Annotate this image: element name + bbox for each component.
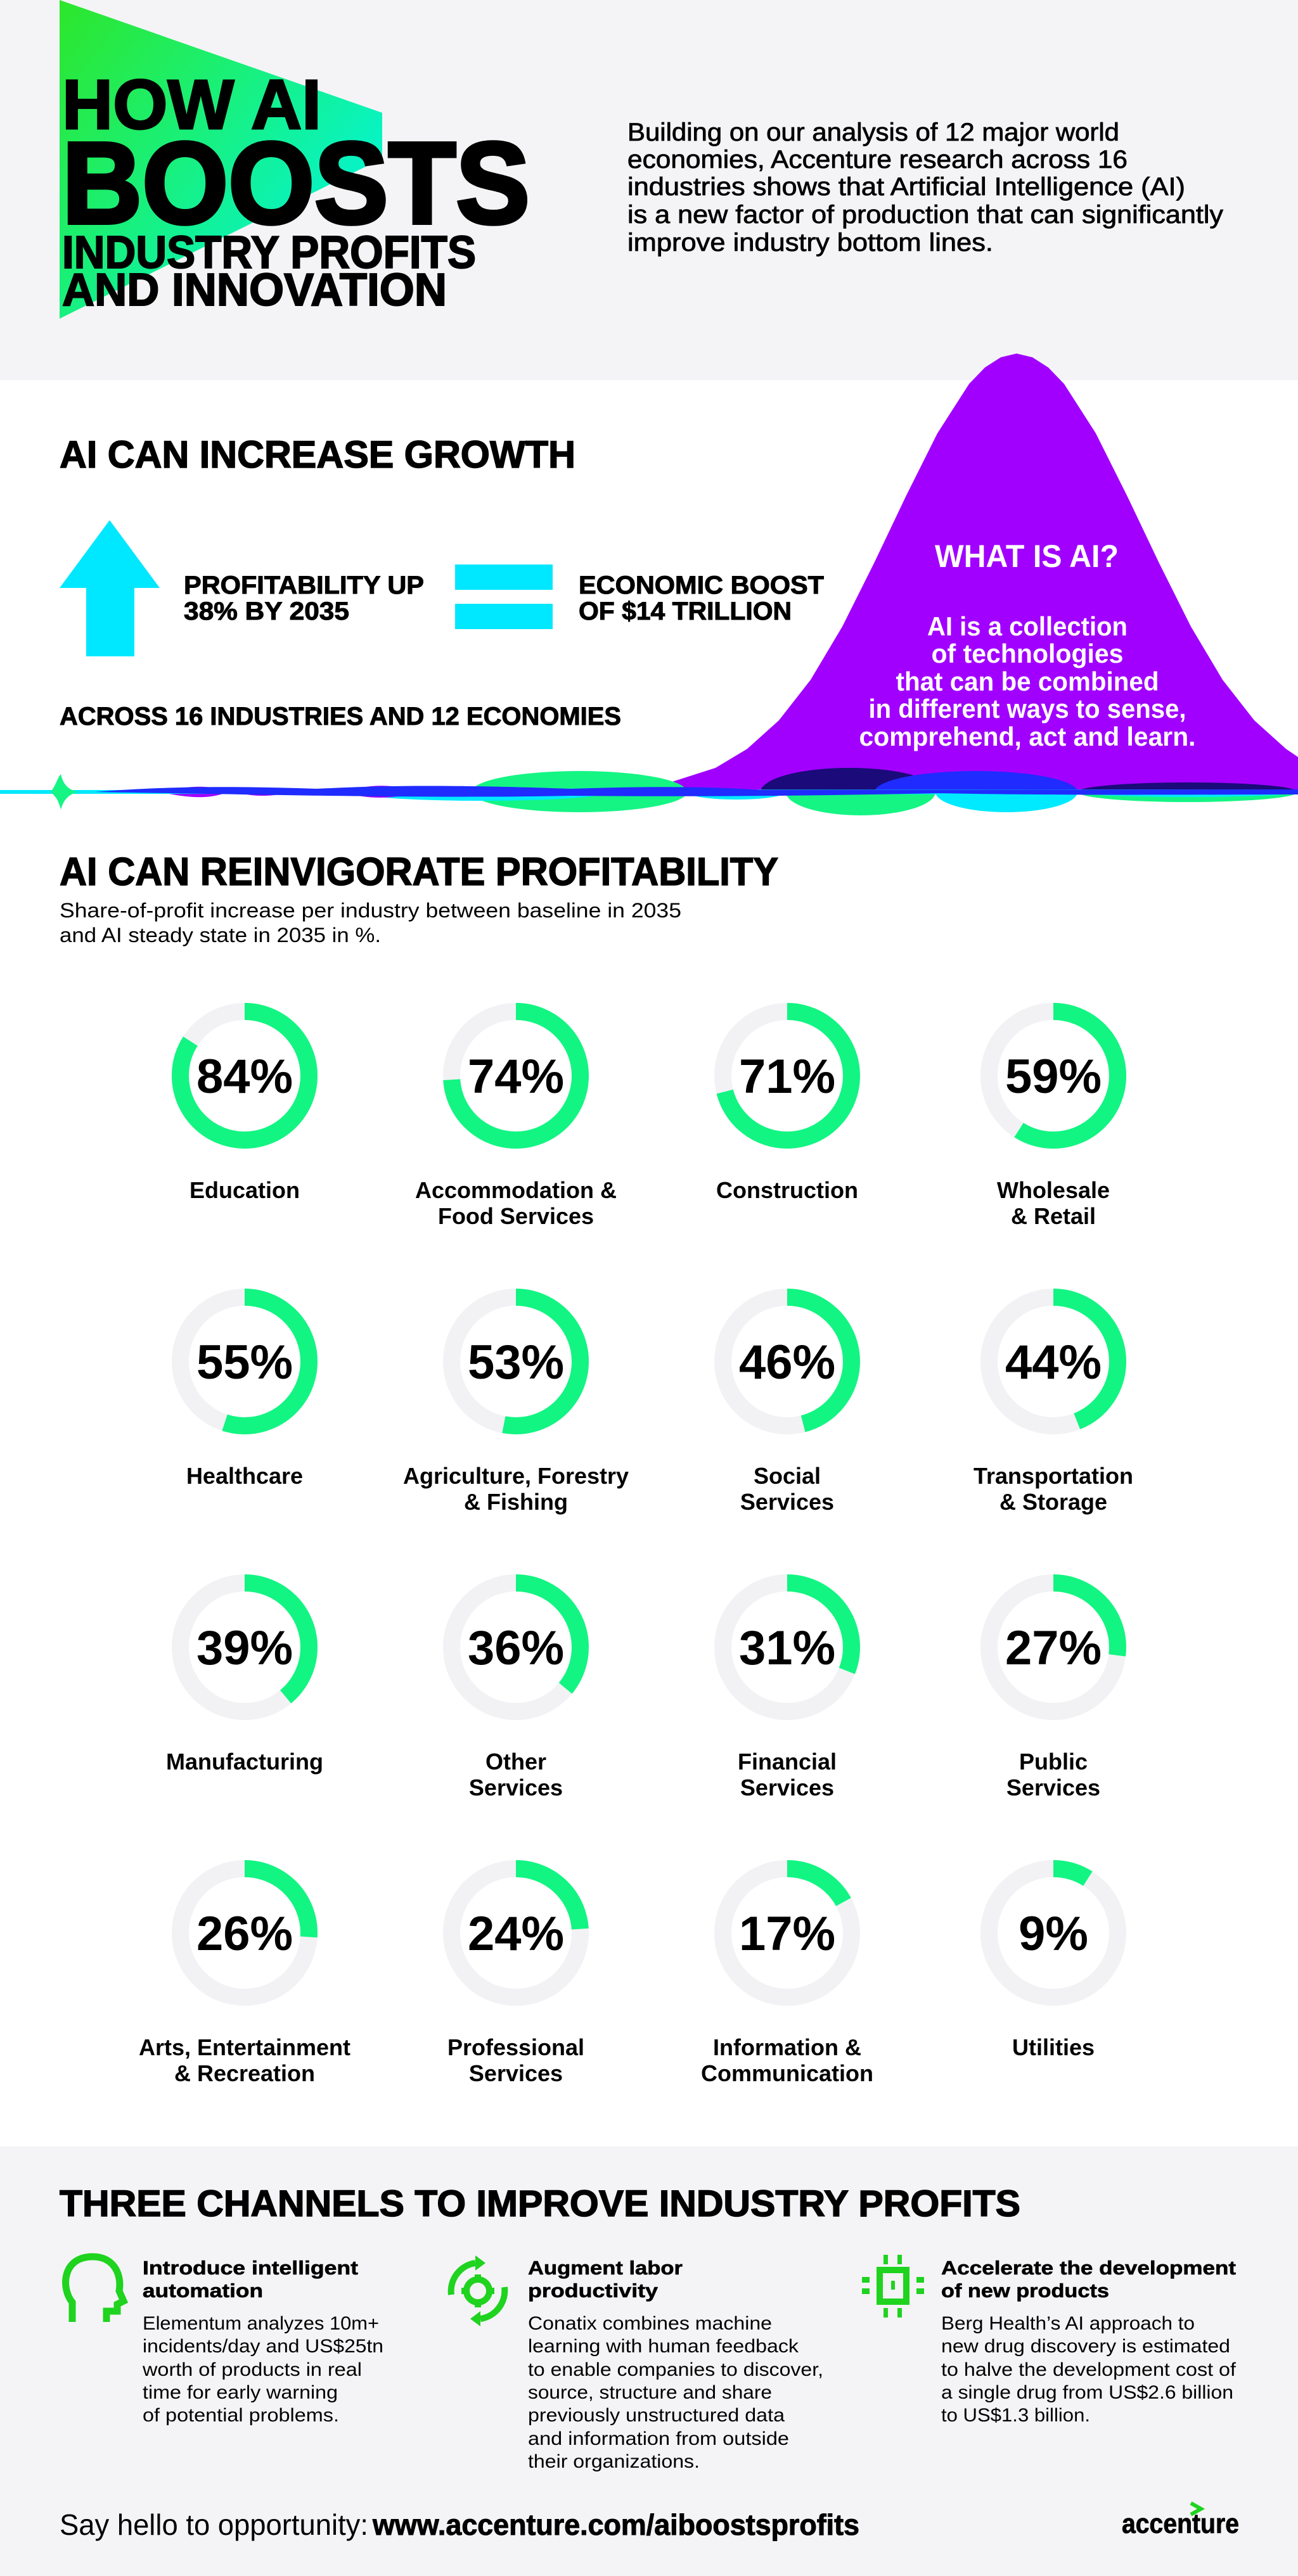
donut: Utilities (989, 1869, 1118, 2060)
donut: Education: 84% (196, 1050, 293, 1104)
donut: Public Services: Services (1006, 1775, 1100, 1801)
icon: rotating gear (451, 2255, 504, 2326)
panel: augment labor productivity: to enable companies to discover, (528, 2359, 823, 2380)
callout: what is AI: that can be combined (896, 666, 1159, 696)
icon: up arrow (60, 520, 160, 656)
icon: head (66, 2257, 124, 2322)
title (62, 66, 530, 316)
text: economic boost: OF $14 TRILLION (579, 597, 792, 625)
text: subtitle: and AI steady state in 2035 in %. (60, 924, 381, 947)
panel: accelerate new products: of new products (941, 2280, 1109, 2302)
panel: intelligent automation: incidents/day and US$25tn (143, 2336, 383, 2357)
donut: Arts: Arts, Entertainment (139, 2034, 350, 2060)
chart: purple AI peak (570, 354, 1298, 792)
title: BOOSTS (62, 118, 530, 248)
donut: Financial Services: 31% (739, 1621, 835, 1675)
text: economic boost (579, 571, 824, 625)
donut: Public Services: Public (1019, 1749, 1088, 1775)
footer: call to action: Say hello to opportunity: (60, 2508, 368, 2541)
donut: Financial Services: Financial (738, 1749, 837, 1775)
donut: Information (701, 1869, 873, 2086)
callout: what is AI: of technologies (932, 639, 1123, 668)
donut: Transportation: 44% (1005, 1336, 1102, 1389)
donut: Professional Services: Professional (447, 2034, 584, 2060)
donut: Social Services: Services (740, 1489, 834, 1515)
donut: Accommodation (415, 1011, 617, 1229)
heading: three channels: THREE CHANNELS TO IMPROVE INDUSTRY PROFITS (60, 2183, 1020, 2224)
intro text: industries shows that Artificial Intelligence (AI) (627, 173, 1185, 201)
text: subtitle (60, 899, 681, 947)
footer: call to action: www.accenture.com/aiboostsprofits (372, 2508, 859, 2541)
panel: intelligent automation: worth of products in real (142, 2359, 362, 2380)
donut: Arts: & Recreation (174, 2060, 315, 2086)
donut: Accommodation: Food Services (438, 1203, 594, 1229)
intro text (627, 118, 1223, 257)
donut: Construction (716, 1011, 858, 1203)
donut: Agriculture: & Fishing (464, 1489, 568, 1515)
panel: augment labor productivity: their organizations. (528, 2451, 700, 2472)
donut: Arts: 26% (196, 1907, 293, 1961)
panel: accelerate new products: Accelerate the development (941, 2257, 1236, 2279)
panel: accelerate new products: to US$1.3 billion. (941, 2405, 1090, 2426)
donut: Other Services: 36% (468, 1621, 564, 1675)
donut: Wholesale: Wholesale (997, 1177, 1110, 1203)
donut: Education: Education (190, 1177, 300, 1203)
donut: Social Services: 46% (739, 1336, 835, 1389)
title: AND INNOVATION (62, 265, 447, 316)
donut: Manufacturing: Manufacturing (166, 1749, 323, 1775)
panel: augment labor productivity: productivity (528, 2280, 659, 2302)
donut: Public Services: 27% (1005, 1621, 1102, 1675)
intro text: improve industry bottom lines. (627, 229, 993, 257)
donut: Professional Services: 24% (468, 1907, 564, 1961)
donut: Construction: Construction (716, 1177, 858, 1203)
donut: Information: Information & (713, 2034, 861, 2060)
donut: Transportation: & Storage (999, 1489, 1107, 1515)
donut: Arts (139, 1869, 350, 2086)
panel: accelerate new products: new drug discovery is estimated (941, 2336, 1230, 2357)
intro text: is a new factor of production that can significantly (627, 201, 1223, 229)
panel: accelerate new products: to halve the development cost of (941, 2359, 1237, 2380)
donut: Healthcare (180, 1298, 309, 1489)
donut: Manufacturing: 39% (196, 1621, 293, 1675)
panel: augment labor productivity: Conatix combines machine (528, 2313, 772, 2334)
text: economic boost: ECONOMIC BOOST (579, 571, 824, 599)
donut: Transportation (974, 1298, 1133, 1515)
text: across industries: ACROSS 16 INDUSTRIES AND 12 ECONOMIES (60, 703, 621, 730)
panel: intelligent automation (66, 2257, 383, 2426)
donut: Transportation: Transportation (974, 1463, 1133, 1489)
panel: accelerate new products (862, 2255, 1237, 2426)
donut: Healthcare: Healthcare (186, 1463, 303, 1489)
panel: augment labor productivity: previously unstructured data (528, 2405, 785, 2426)
donut: Utilities: 9% (1018, 1907, 1088, 1961)
panel: augment labor productivity: Augment labor (528, 2257, 683, 2279)
panel: intelligent automation: of potential problems. (143, 2405, 339, 2426)
panel: accelerate new products: Berg Health’s AI approach to (941, 2313, 1195, 2334)
donut: Agriculture (403, 1298, 629, 1515)
donut: Wholesale: 59% (1005, 1050, 1102, 1104)
donut: Information: Communication (701, 2060, 873, 2086)
donut: Other Services: Services (469, 1775, 563, 1801)
donut: Accommodation: Accommodation & (415, 1177, 617, 1203)
donut: Agriculture: Agriculture, Forestry (403, 1463, 629, 1489)
text: profitability up: 38% BY 2035 (184, 597, 349, 625)
donut: Wholesale: & Retail (1011, 1203, 1096, 1229)
donut: Professional Services (447, 1869, 584, 2086)
panel: augment labor productivity (451, 2255, 823, 2472)
donut: Social Services: Social (754, 1463, 821, 1489)
donut: Agriculture: 53% (468, 1336, 564, 1389)
donut: Manufacturing (166, 1583, 323, 1775)
title: INDUSTRY PROFITS (62, 227, 476, 278)
panel: intelligent automation: time for early warning (143, 2382, 338, 2403)
icon: green chevron triangle (60, 0, 382, 319)
callout: what is AI: comprehend, act and learn. (859, 722, 1195, 751)
donut: Education (180, 1011, 309, 1203)
logo: accenture: accenture (1122, 2508, 1239, 2539)
donut chart grid (139, 1011, 1133, 2086)
icon: equals sign (455, 564, 553, 629)
chart: wave band (0, 768, 1298, 815)
text: profitability up (184, 571, 424, 625)
callout: what is AI: AI is a collection (927, 611, 1128, 641)
panel: augment labor productivity: learning with human feedback (528, 2336, 799, 2357)
text: profitability up: PROFITABILITY UP (184, 571, 424, 599)
intro text: Building on our analysis of 12 major world (627, 118, 1119, 146)
callout: what is AI (859, 539, 1195, 751)
panel: intelligent automation: Introduce intelligent (143, 2257, 358, 2279)
heading: AI can reinvigorate profitability: AI CAN REINVIGORATE PROFITABILITY (60, 850, 778, 894)
donut: Financial Services (723, 1583, 852, 1801)
callout: what is AI: WHAT IS AI? (935, 539, 1119, 574)
text: subtitle: Share-of-profit increase per industry between baseline in 2035 (60, 899, 681, 922)
callout: what is AI: in different ways to sense, (868, 694, 1186, 724)
panel: augment labor productivity: source, structure and share (528, 2382, 772, 2403)
donut: Other Services (451, 1583, 581, 1801)
donut: Public Services (989, 1583, 1118, 1801)
title: HOW AI (62, 66, 321, 144)
donut: Utilities: Utilities (1012, 2034, 1095, 2060)
donut: Information: 17% (739, 1907, 835, 1961)
footer: call to action (60, 2508, 859, 2541)
panel: accelerate new products: a single drug from US$2.6 billion (941, 2382, 1233, 2403)
donut: Healthcare: 55% (196, 1336, 293, 1389)
donut: Financial Services: Services (740, 1775, 834, 1801)
donut: Other Services: Other (485, 1749, 546, 1775)
panel: intelligent automation: automation (143, 2280, 263, 2302)
panel: intelligent automation: Elementum analyzes 10m+ (143, 2313, 379, 2334)
icon: chip (862, 2255, 924, 2318)
heading: AI can increase growth: AI CAN INCREASE GROWTH (60, 433, 575, 476)
donut: Construction: 71% (739, 1050, 835, 1104)
donut: Accommodation: 74% (468, 1050, 564, 1104)
donut: Wholesale (989, 1011, 1118, 1229)
donut: Professional Services: Services (469, 2060, 563, 2086)
intro text: economies, Accenture research across 16 (627, 146, 1128, 174)
panel: augment labor productivity: and information from outside (528, 2428, 789, 2449)
donut: Social Services (723, 1298, 852, 1515)
